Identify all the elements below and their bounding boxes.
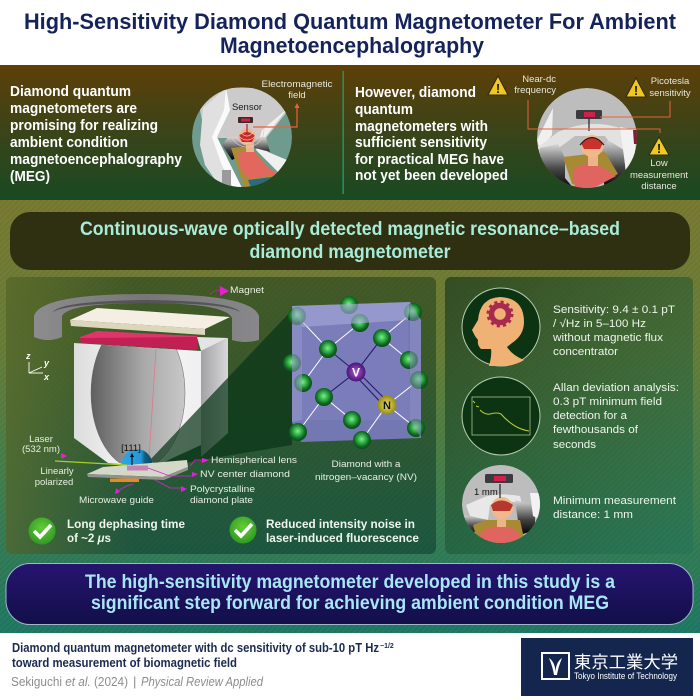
- labels: setup components: (532 nm): [22, 444, 60, 455]
- labels: setup components: polarized: [35, 477, 73, 488]
- illustration: laser: [55, 461, 127, 465]
- illustration: diamond lattice with NV: [283, 296, 428, 449]
- text: promise of diamond magnetometers: ambient condition: [10, 135, 128, 151]
- label: electromagnetic field: field: [288, 90, 306, 101]
- label: picotesla sensitivity: sensitivity: [649, 88, 691, 99]
- footer citation: Physical Review Applied: [141, 674, 264, 689]
- illustration: red magnet: [80, 331, 198, 350]
- heading band: diamond magnetometer: [250, 242, 451, 263]
- conclusion banner: significant step forward for achieving ambient condition MEG: [91, 593, 609, 614]
- illustration: optical block and lens: [74, 337, 228, 464]
- text: minimum distance: [553, 495, 676, 521]
- text: minimum distance: distance: 1 mm: [553, 509, 633, 521]
- illustration: diamond lattice with NV: V: [352, 366, 360, 380]
- illustration: 1 mm distance: [462, 465, 541, 548]
- text: sensitivity: [552, 304, 675, 358]
- text: sensitivity: without magnetic flux: [552, 332, 664, 344]
- arrow: field to label: [253, 103, 300, 127]
- illustration: light cone toward lattice: [150, 310, 292, 472]
- illustration: 1 mm distance: 1 mm: [474, 487, 498, 498]
- label: near-dc frequency: frequency: [514, 85, 556, 96]
- text: sensitivity: / √Hz in 5–100 Hz: [553, 318, 646, 330]
- text: Allan deviation analysis: seconds: [553, 439, 597, 451]
- heading band: [10, 212, 690, 270]
- text: the remaining challenge: sufficient sensitivity: [355, 135, 487, 151]
- labels: setup components: NV center diamond: [200, 469, 290, 480]
- text: Allan deviation analysis: detection for a: [553, 410, 628, 422]
- text: the remaining challenge: magnetometers with: [355, 119, 488, 135]
- illustration: magnet ring: [34, 294, 259, 342]
- text: Allan deviation analysis: 0.3 pT minimum field: [553, 396, 662, 408]
- footer citation: Sekiguchi et al. (2024): [11, 674, 128, 689]
- illustration: diamond lattice with NV: N: [383, 400, 391, 412]
- text: the remaining challenge: [355, 85, 508, 184]
- labels: setup components: Diamond with a: [332, 459, 401, 470]
- labels: setup components: Linearly: [40, 466, 74, 477]
- illustration: NV diamond: [127, 466, 148, 470]
- panel: results: [445, 277, 693, 554]
- footer citation: Diamond quantum magnetometer with dc sensitivity of sub-10 pT Hz: [12, 641, 379, 655]
- logo: Tokyo Institute of Technology: [521, 638, 693, 696]
- labels: setup components: Polycrystalline: [190, 484, 255, 495]
- label: low measurement distance: Low: [650, 158, 668, 169]
- title: High-Sensitivity Diamond Quantum Magnetometer For Ambient: [24, 9, 677, 34]
- text: promise of diamond magnetometers: [10, 84, 182, 185]
- text: promise of diamond magnetometers: magnetoencephalography: [10, 152, 182, 168]
- panel: background and problem: [0, 65, 700, 200]
- text: Allan deviation analysis: Allan deviation analysis:: [553, 382, 679, 394]
- illustration: microwave guide: [110, 478, 139, 482]
- illustration: beam: [149, 349, 156, 458]
- text: the remaining challenge: for practical MEG have: [355, 152, 504, 168]
- title: Magnetoencephalography: [220, 33, 485, 58]
- illustration: glass plate: [70, 308, 230, 335]
- icon: warning near-dc: [488, 76, 508, 96]
- illustration: diamond plate: [87, 460, 188, 480]
- label: low measurement distance: [630, 158, 688, 192]
- text: promise of diamond magnetometers: Diamond quantum: [10, 84, 131, 100]
- logo: Tokyo Institute of Technology: 東京工業大学: [574, 652, 678, 672]
- gradient backdrop: [0, 200, 700, 633]
- illustration: patient under sensor: [192, 87, 292, 190]
- text: promise of diamond magnetometers: promising for realizing: [10, 118, 158, 134]
- icon: check noise: [230, 516, 256, 544]
- label: electromagnetic field: [262, 79, 333, 101]
- label: picotesla sensitivity: [649, 76, 691, 99]
- labels: setup components: Microwave guide: [79, 495, 154, 506]
- icon: warning picotesla: !: [634, 83, 638, 98]
- text: long dephasing time: [67, 517, 185, 545]
- text: reduced noise: laser-induced fluorescence: [266, 531, 419, 545]
- label: near-dc frequency: Near-dc: [522, 74, 556, 85]
- text: the remaining challenge: not yet been developed: [355, 168, 508, 184]
- label: low measurement distance: distance: [641, 181, 677, 192]
- text: Allan deviation analysis: fewthousands of: [553, 424, 639, 436]
- icon: head with gear: [462, 288, 540, 366]
- footer citation: −1/2: [380, 643, 394, 650]
- text: sensitivity: concentrator: [553, 346, 618, 358]
- icon: warning distance: [649, 137, 669, 156]
- text: sensitivity: Sensitivity: 9.4 ± 0.1 pT: [553, 304, 675, 316]
- label: 111: [111]: [121, 443, 141, 454]
- text: promise of diamond magnetometers: (MEG): [10, 169, 50, 185]
- pointers: magenta callouts: [61, 286, 229, 494]
- labels: setup components: Magnet: [230, 285, 264, 296]
- logo: Tokyo Institute of Technology: Tokyo Institute of Technology: [574, 671, 677, 681]
- labels: setup components: [22, 285, 417, 506]
- text: reduced noise: Reduced intensity noise in: [266, 517, 415, 531]
- label: low measurement distance: measurement: [630, 170, 688, 181]
- icon: warning distance: !: [657, 141, 661, 156]
- axis labels: [25, 351, 50, 382]
- conclusion banner: The high-sensitivity magnetometer developed in this study is a: [85, 572, 615, 593]
- illustration: patient close-up: [537, 88, 640, 190]
- callout lines: requirements: [528, 100, 670, 133]
- text: long dephasing time: Long dephasing time: [67, 517, 185, 531]
- text: Allan deviation analysis: [553, 382, 679, 451]
- text: the remaining challenge: quantum: [355, 102, 413, 118]
- text: minimum distance: Minimum measurement: [553, 495, 676, 507]
- conclusion banner: [6, 564, 693, 624]
- chart: Allan deviation: [462, 377, 540, 455]
- icon: check dephasing: [28, 518, 56, 544]
- divider: [342, 71, 344, 194]
- title: [24, 9, 677, 58]
- label: electromagnetic field: Electromagnetic: [262, 79, 333, 90]
- footer citation: toward measurement of biomagnetic field: [12, 656, 237, 670]
- text: reduced noise: [266, 517, 419, 545]
- footer citation: [11, 641, 394, 689]
- axis labels: x: [43, 372, 50, 382]
- label: picotesla sensitivity: Picotesla: [651, 76, 690, 87]
- labels: setup components: nitrogen–vacancy (NV): [315, 472, 417, 483]
- labels: setup components: Laser: [29, 434, 53, 445]
- text: long dephasing time: of ~2 μs: [67, 531, 111, 545]
- panel: magnetometer setup: [6, 277, 436, 554]
- icon: warning near-dc: !: [496, 81, 500, 96]
- heading band: Continuous-wave optically detected magnetic resonance–based: [80, 219, 620, 240]
- axes: [29, 362, 43, 373]
- text: promise of diamond magnetometers: magnetometers are: [10, 101, 137, 117]
- axis labels: y: [43, 358, 50, 368]
- arrow: 111 direction: [130, 453, 134, 465]
- illustration: hemispherical lens: [121, 449, 153, 467]
- axis labels: z: [25, 351, 31, 361]
- label: sensor: Sensor: [232, 102, 262, 113]
- labels: setup components: Hemispherical lens: [211, 455, 297, 466]
- labels: setup components: diamond plate: [190, 495, 253, 506]
- text: the remaining challenge: However, diamond: [355, 85, 476, 101]
- icon: warning picotesla: [626, 78, 646, 98]
- footer citation: |: [133, 674, 136, 689]
- label: near-dc frequency: [514, 74, 556, 96]
- emblem: [542, 653, 569, 679]
